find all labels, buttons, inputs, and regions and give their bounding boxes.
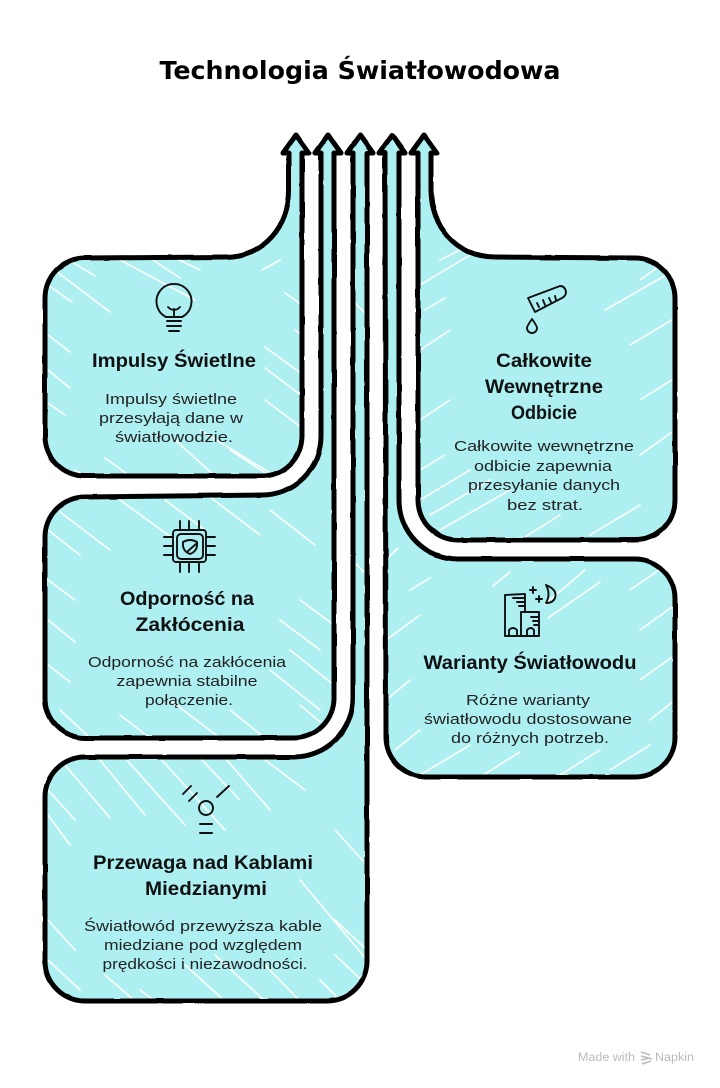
body text: Odporność na zakłócenia bbox=[88, 654, 287, 671]
body text: miedziane pod względem bbox=[104, 937, 302, 954]
body text: Całkowite wewnętrzne bbox=[454, 438, 634, 455]
body text: Światłowód przewyższa kable bbox=[84, 917, 322, 935]
body text: światłowodu dostosowane bbox=[424, 711, 632, 728]
heading: Zakłócenia bbox=[136, 615, 245, 636]
arrow and card shape bbox=[45, 135, 309, 482]
arrow and card shape bbox=[45, 135, 373, 1001]
heading: Całkowite bbox=[496, 351, 592, 372]
body text: bez strat. bbox=[507, 497, 583, 514]
heading: Impulsy Świetlne bbox=[92, 350, 256, 372]
heading: Warianty Światłowodu bbox=[424, 652, 636, 674]
body text bbox=[99, 391, 243, 446]
body text: światłowodzie. bbox=[115, 429, 233, 446]
body text: do różnych potrzeb. bbox=[451, 730, 609, 747]
panel: Przewaga nad Kablami Miedzianymi bbox=[45, 135, 373, 1001]
body text: połączenie. bbox=[145, 692, 233, 709]
heading: Odbicie bbox=[511, 403, 577, 424]
icon: buildings, stars and moon bbox=[505, 585, 556, 636]
panel: Całkowite Wewnętrzne Odbicie bbox=[411, 135, 675, 540]
body text: zapewnia stabilne bbox=[116, 673, 258, 690]
footer: Made with Napkin: Napkin bbox=[655, 1052, 694, 1064]
body text bbox=[84, 917, 322, 973]
heading: Wewnętrzne bbox=[485, 377, 603, 398]
heading bbox=[120, 589, 254, 636]
body text: Impulsy świetlne bbox=[105, 391, 237, 408]
body text: Różne warianty bbox=[466, 692, 591, 709]
body text: odbicie zapewnia bbox=[474, 458, 613, 475]
body text: przesyłają dane w bbox=[99, 410, 243, 427]
panel: Odporność na Zakłócenia bbox=[45, 135, 341, 738]
body text bbox=[424, 692, 632, 747]
heading bbox=[485, 351, 603, 424]
heading: Odporność na bbox=[120, 589, 254, 610]
body text bbox=[88, 654, 287, 709]
arrow and card shape bbox=[45, 135, 341, 738]
title: Technologia Światłowodowa bbox=[160, 55, 560, 85]
icon: light and reflection bbox=[183, 786, 229, 833]
body text: przesyłanie danych bbox=[468, 477, 620, 494]
body text bbox=[454, 438, 634, 514]
footer: Made with Napkin bbox=[578, 1052, 694, 1064]
icon: chip with shield bbox=[164, 521, 215, 572]
footer: Made with Napkin: Made with bbox=[578, 1052, 635, 1064]
heading: Przewaga nad Kablami bbox=[93, 853, 313, 874]
panel: Warianty Światłowodu bbox=[379, 135, 675, 777]
icon: light bulb bbox=[156, 284, 192, 331]
body text: prędkości i niezawodności. bbox=[102, 956, 308, 973]
panel: Impulsy Świetlne bbox=[45, 135, 309, 482]
arrow and card shape bbox=[379, 135, 675, 777]
arrow and card shape bbox=[411, 135, 675, 540]
heading: Miedzianymi bbox=[145, 879, 267, 900]
icon: test tube and drop bbox=[527, 286, 566, 333]
heading bbox=[93, 853, 313, 900]
